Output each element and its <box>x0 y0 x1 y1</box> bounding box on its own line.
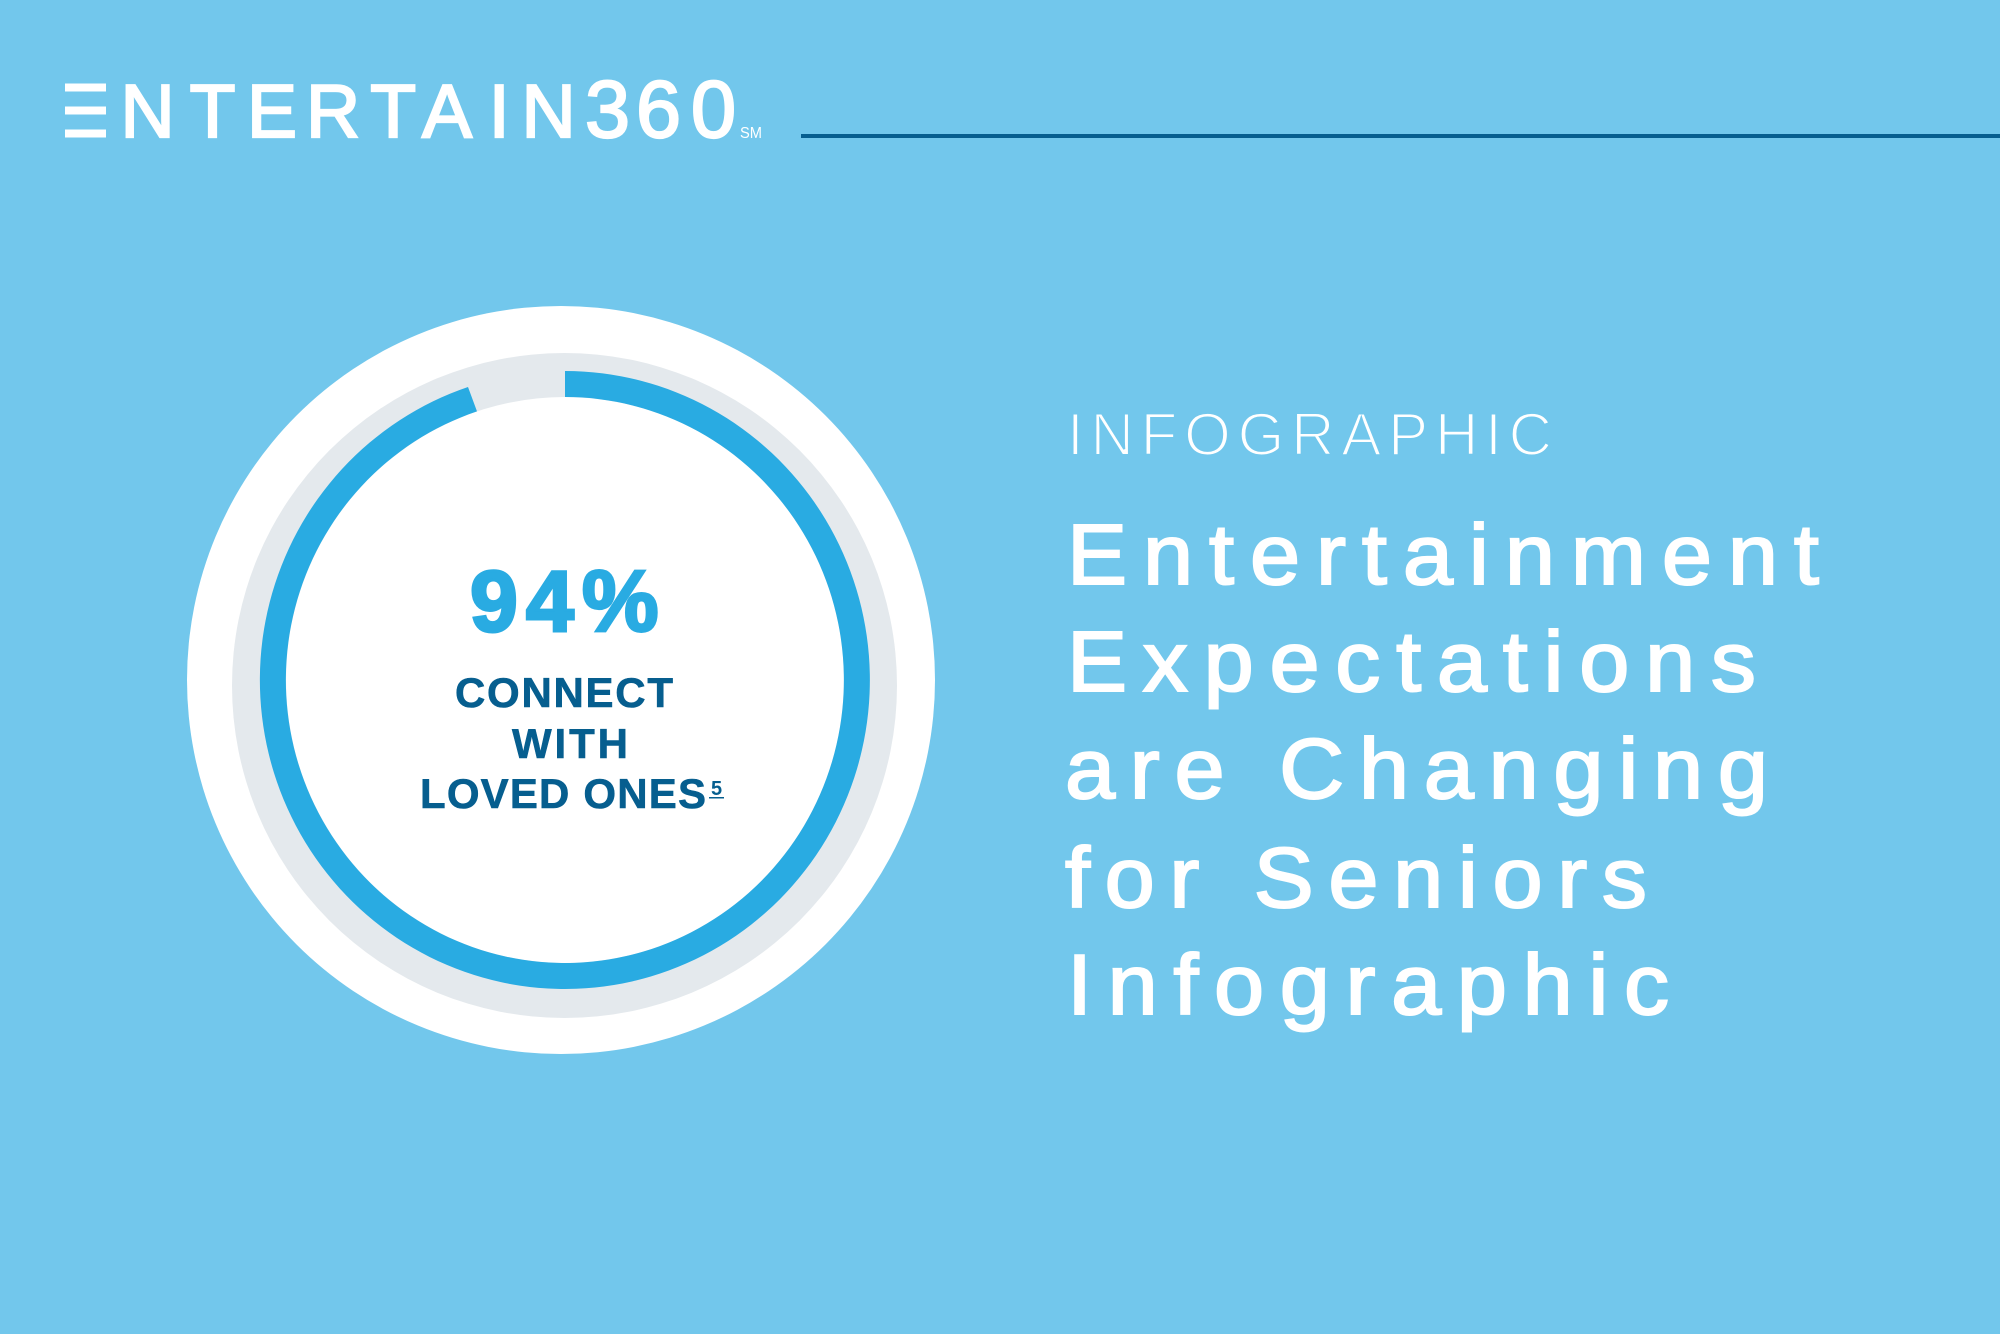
header rule <box>801 134 2000 138</box>
title line 5: Infographic <box>1067 937 1669 1032</box>
logo service mark: SM <box>740 125 762 142</box>
logo wordmark: NTERTAIN <box>120 69 576 153</box>
icon: three bars forming the letter E <box>65 84 106 138</box>
logo wordmark: 3 <box>585 65 630 155</box>
logo wordmark: 0 <box>691 65 736 155</box>
caption line 3: LOVED ONES <box>420 770 706 817</box>
logo wordmark: 6 <box>636 65 681 155</box>
outer white disc <box>187 306 935 1054</box>
footnote marker 5: 5 <box>711 778 722 800</box>
title <box>1065 507 1819 1032</box>
title line 3: are Changing <box>1065 721 1768 816</box>
title line 1: Entertainment <box>1067 507 1819 602</box>
statistic caption <box>420 669 706 817</box>
caption line 1: CONNECT <box>455 669 673 716</box>
caption line 2: WITH <box>512 720 628 767</box>
grey track ring <box>232 353 897 1018</box>
logo: Entertain360 <box>65 65 762 155</box>
eyebrow: INFOGRAPHIC: INFOGRAPHIC <box>1067 401 1552 468</box>
statistic: 94%: 94% <box>470 554 658 650</box>
title line 4: for Seniors <box>1065 830 1647 925</box>
inner white disc <box>286 397 844 963</box>
blue progress arc <box>260 371 870 989</box>
title line 2: Expectations <box>1067 614 1756 709</box>
donut chart: 94% connect with loved ones <box>187 306 935 1054</box>
